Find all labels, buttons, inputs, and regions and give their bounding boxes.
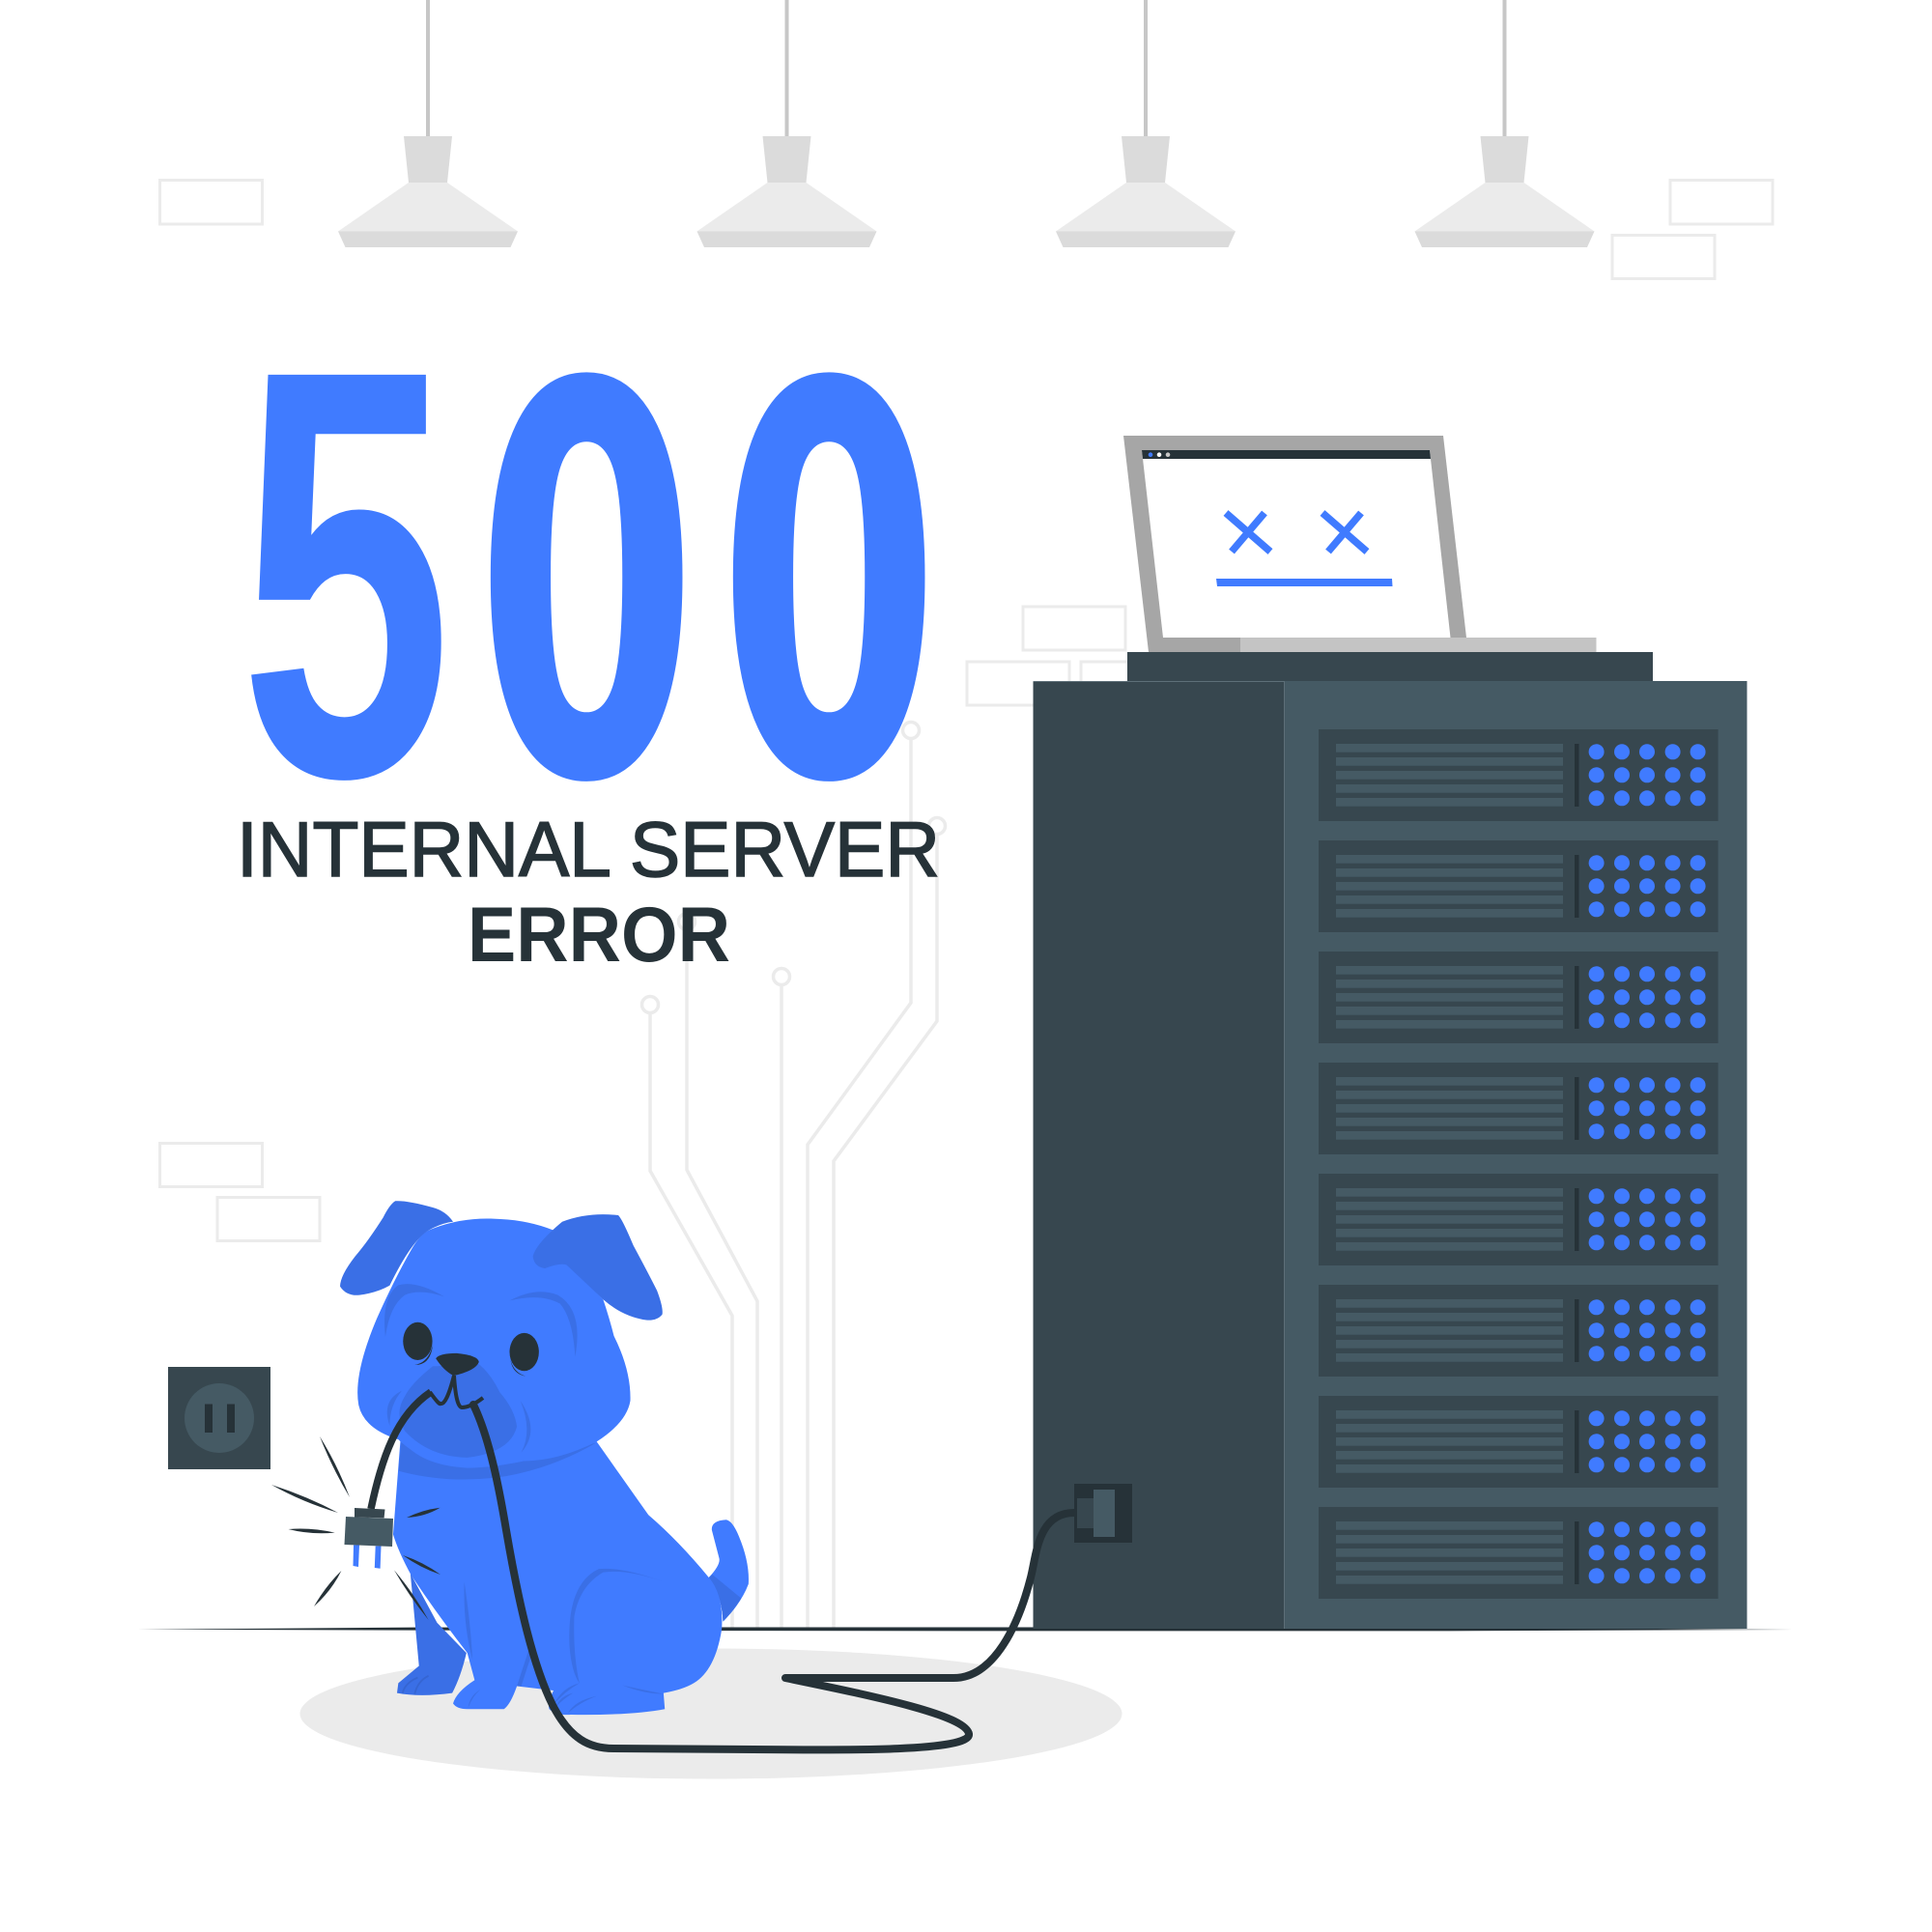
laptop screen <box>1142 450 1451 638</box>
server front panel <box>1285 681 1747 1629</box>
server top block <box>1127 652 1653 681</box>
lamp 3 <box>1056 0 1236 247</box>
error eye right <box>1322 513 1367 552</box>
server socket <box>1074 1484 1132 1543</box>
heading: 500: 5 <box>240 248 452 898</box>
laptop base <box>1240 638 1596 652</box>
dog tail <box>709 1520 749 1622</box>
sparks <box>271 1436 440 1620</box>
dog neck shadow <box>399 1439 596 1480</box>
cable to server <box>473 1405 1074 1749</box>
dog right eye <box>510 1333 539 1377</box>
wall outlet <box>168 1367 270 1469</box>
dog <box>340 1201 749 1715</box>
error eye left <box>1226 513 1270 552</box>
lamp 2 <box>697 0 877 247</box>
server tower <box>1034 652 1747 1629</box>
browser dots <box>1149 452 1170 457</box>
circuit traces <box>641 723 945 1629</box>
dog left eye <box>403 1322 433 1365</box>
laptop <box>1123 436 1596 652</box>
dog far leg <box>397 1574 467 1695</box>
wall bricks <box>160 180 1773 1240</box>
floor line <box>138 1627 1793 1631</box>
heading: error: ERROR <box>468 892 730 979</box>
heading: 500: 0 <box>718 272 940 902</box>
cable to plug <box>371 1392 431 1509</box>
dog left ear <box>340 1201 453 1295</box>
dog muzzle <box>399 1362 517 1458</box>
lamp 1 <box>338 0 518 247</box>
dog body details <box>464 1569 664 1714</box>
browser bar <box>1142 450 1431 459</box>
server slots <box>1319 729 1719 1599</box>
dog mouth <box>430 1376 483 1407</box>
dog face wrinkles <box>384 1284 578 1453</box>
heading: internal server: INTERNAL SERVER <box>237 807 940 894</box>
dog right ear <box>533 1214 663 1321</box>
error mouth <box>1216 579 1393 586</box>
lamp 4 <box>1414 0 1594 247</box>
dog head <box>357 1218 631 1466</box>
unplugged plug <box>344 1508 393 1569</box>
laptop lid <box>1123 436 1466 652</box>
dog nose <box>436 1353 479 1376</box>
dog body <box>393 1439 722 1715</box>
lamps <box>338 0 1594 247</box>
heading: 500: 0 <box>475 272 697 902</box>
floor shadow <box>299 1648 1122 1779</box>
server side panel <box>1034 681 1285 1629</box>
heading: 500 <box>240 248 940 902</box>
